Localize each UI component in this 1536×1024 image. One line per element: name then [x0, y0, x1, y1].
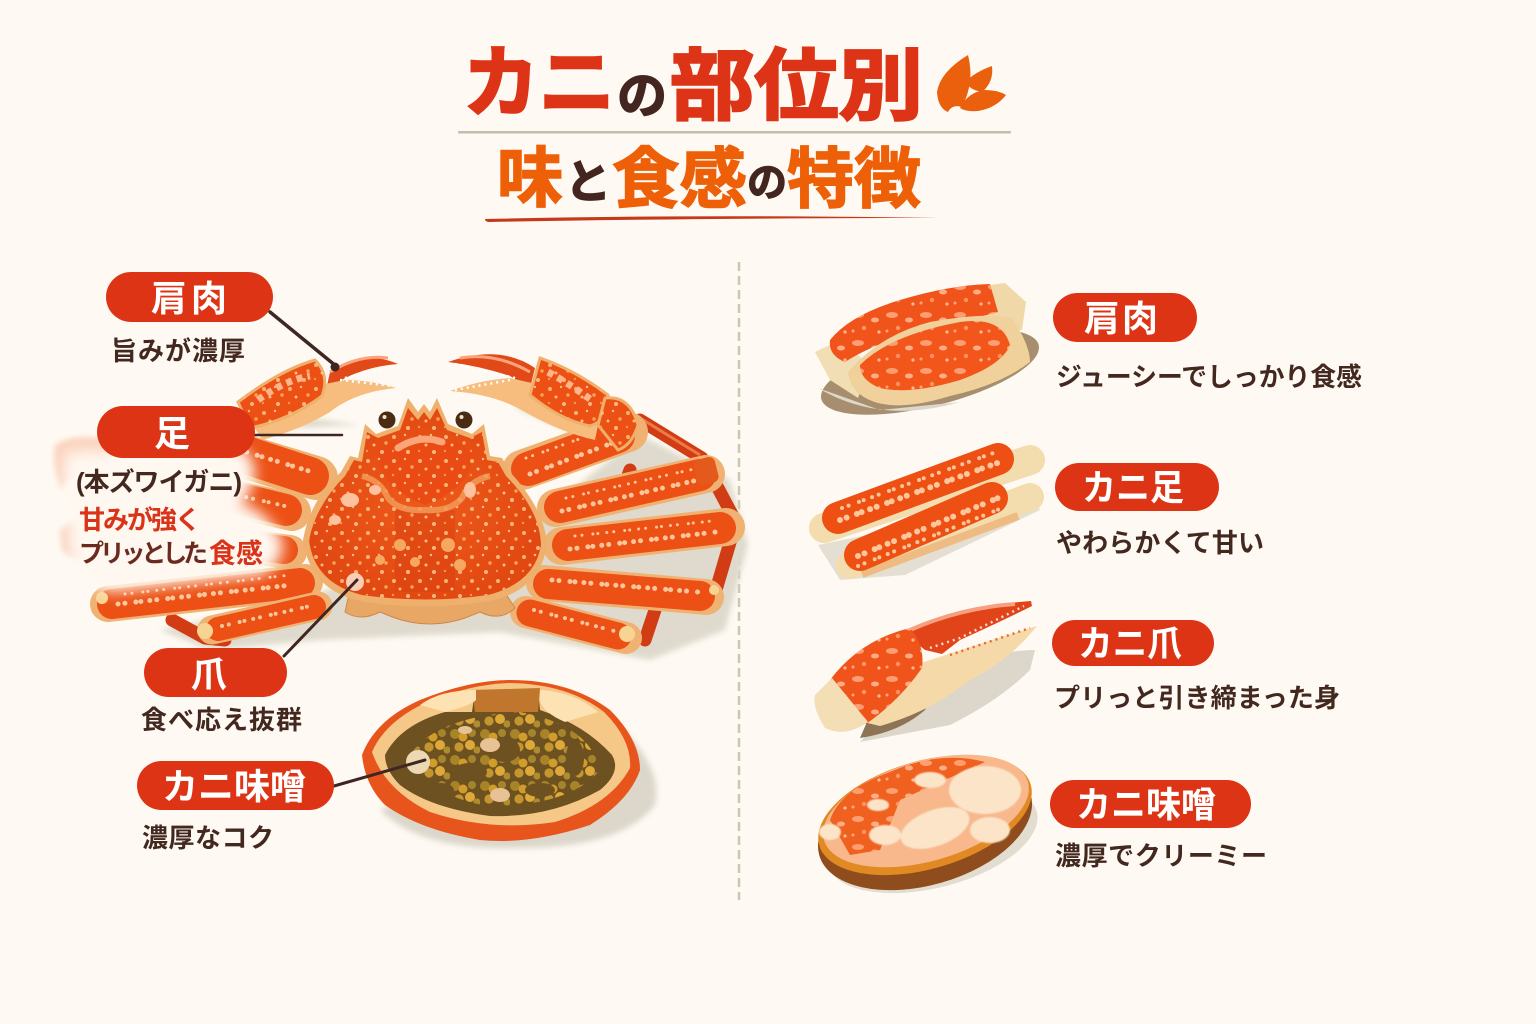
subtitle: と	[565, 156, 611, 208]
right description: tomalley: 濃厚でクリーミー	[1055, 841, 1267, 871]
divider	[738, 262, 740, 900]
right label: leg: カニ足	[1082, 467, 1184, 508]
right description: shoulder: ジューシーでしっかり食感	[1056, 362, 1362, 392]
right label: shoulder	[1053, 293, 1197, 342]
crab carapace	[303, 398, 547, 606]
subtitle	[497, 141, 921, 216]
crab underside	[345, 585, 515, 624]
subtitle: 食感	[612, 142, 747, 216]
left description: texture: プリッとした	[79, 540, 208, 568]
right illustration: shoulder meat	[813, 283, 1047, 432]
left description: claw: 食べ応え抜群	[141, 705, 302, 735]
title: 部位別	[670, 42, 923, 130]
illustration: tomalley shell	[362, 680, 656, 848]
left description: sweetness: 甘みが強く	[79, 505, 201, 535]
left label: tomalley: カニ味噌	[162, 766, 306, 807]
title: カニ	[463, 39, 615, 127]
title: の	[617, 68, 667, 124]
right illustration: leg meat	[818, 452, 1040, 580]
subtitle: 特徴	[787, 142, 921, 216]
left description: species: (本ズワイガニ)	[76, 467, 242, 497]
crab claw: left	[238, 357, 398, 440]
right label: claw	[1052, 620, 1214, 666]
left label: claw: 爪	[191, 654, 227, 695]
crab legs: right	[522, 428, 726, 642]
subtitle underline	[485, 216, 938, 222]
left label: leg: 足	[154, 413, 190, 454]
left label: shoulder	[106, 272, 273, 322]
crab shadow	[160, 385, 748, 660]
crab legs: left	[96, 450, 318, 639]
right description: leg: やわらかくて甘い	[1056, 528, 1264, 558]
title	[463, 39, 923, 130]
right label: claw: カニ爪	[1078, 623, 1182, 664]
left label: claw	[144, 648, 287, 697]
panel: whole crab	[54, 354, 748, 660]
right label: tomalley	[1050, 780, 1251, 828]
pointer line: shoulder	[270, 312, 340, 372]
halo behind leg text	[54, 437, 283, 592]
right label: leg	[1055, 463, 1219, 511]
left label: shoulder: 肩肉	[151, 278, 227, 319]
pointer line: claw	[284, 573, 364, 656]
left description: tomalley: 濃厚なコク	[142, 823, 274, 853]
left description: texture	[79, 539, 263, 569]
icon: leaves	[937, 55, 1006, 112]
left description: shoulder: 旨みが濃厚	[111, 336, 245, 366]
left label: leg	[97, 406, 255, 458]
subtitle: 味	[497, 141, 563, 215]
left description: texture: 食感	[209, 539, 263, 569]
title rule	[458, 131, 1011, 134]
pointer line: tomalley	[334, 750, 430, 786]
crab claw: right	[448, 354, 638, 450]
subtitle: の	[747, 161, 787, 205]
pointer line: leg	[255, 434, 342, 436]
right illustration: tomalley bowl	[803, 733, 1049, 913]
right description: claw: プリっと引き締まった身	[1054, 683, 1340, 713]
right illustration: claw meat	[814, 601, 1037, 742]
crab back leg joints	[172, 418, 736, 640]
crab eyes	[378, 412, 472, 428]
right label: tomalley: カニ味噌	[1076, 784, 1216, 825]
right label: shoulder: 肩肉	[1084, 298, 1158, 339]
left label: tomalley	[137, 761, 334, 810]
